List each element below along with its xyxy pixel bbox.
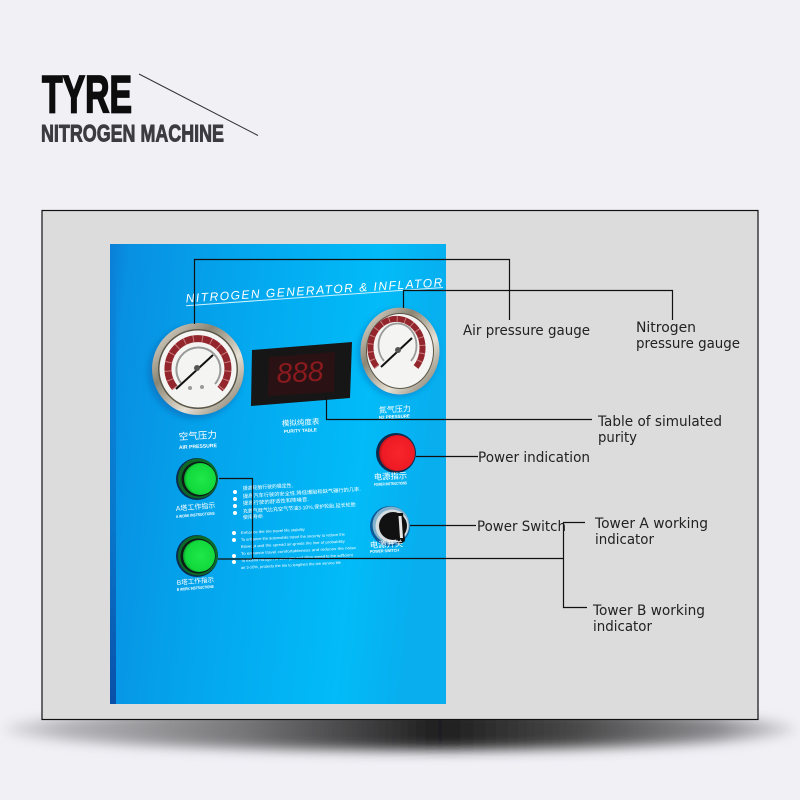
- power indicator light: [376, 433, 416, 473]
- label: Nitrogen pressure gauge: pressure gauge: [636, 336, 740, 352]
- air pressure label: 空气压力: [179, 429, 217, 443]
- tower A label: A WORK INSTRUCTIONS: [176, 511, 215, 519]
- instruction text: 使用寿命: [243, 513, 263, 521]
- subtitle: NITROGEN MACHINE: NITROGEN MACHINE: [41, 120, 224, 148]
- framed panel: [42, 210, 758, 720]
- instruction text: Enhance the tire travel life stability: [241, 528, 305, 535]
- tower A label: [175, 501, 216, 519]
- instruction text: [232, 482, 361, 570]
- instruction text: 提高轮胎行驶的稳定性,: [243, 482, 293, 492]
- air pressure label: AIR PRESSURE: [179, 443, 218, 451]
- power switch label: POWER SWITCH: [370, 547, 399, 554]
- label: Power Switch: Power Switch: [477, 519, 566, 535]
- tower B label: [176, 575, 215, 592]
- nitrogen pressure label: 氮气压力: [379, 403, 411, 415]
- label: Tower B working indicator: Tower B working: [592, 603, 705, 619]
- instruction text: To extend nitrogen to save gas and allow speed to the sufficient: [241, 553, 354, 563]
- instruction text: To enhance travel comfortableness and reduces the noise: [241, 546, 356, 556]
- label: Tower A working indicator: [594, 516, 708, 548]
- leader lines: [194, 260, 672, 608]
- purity table label: 模拟纯度表: [282, 416, 320, 428]
- instruction text: 提高汽车行驶的安全性,降低爆胎和缺气碾行的几率.: [243, 486, 361, 500]
- label: Nitrogen pressure gauge: [636, 320, 740, 352]
- air pressure gauge: [148, 323, 244, 419]
- tower B label: B塔工作指示: [176, 575, 215, 587]
- label: Nitrogen pressure gauge: Nitrogen: [636, 320, 696, 336]
- tower A label: A塔工作指示: [175, 501, 216, 513]
- floor shadow: [4, 708, 796, 750]
- panel heading: NITROGEN GENERATOR & INFLATOR: [185, 275, 443, 305]
- decorative title slash: [139, 74, 258, 136]
- machine front panel: [110, 244, 446, 704]
- tower B indicator light: [176, 535, 218, 577]
- instruction text: 提高行驶的舒适性和降噪音.: [243, 496, 309, 507]
- instruction text: air 3-10%, protects the tire to lengthen the tire service life: [241, 561, 341, 570]
- tower B label: B WORK INSTRUCTIONS: [177, 584, 214, 592]
- label: Tower B working indicator: indicator: [593, 619, 652, 635]
- nitrogen pressure gauge: [358, 308, 440, 397]
- purity table label: PURITY TABLE: [284, 427, 317, 434]
- label: Power indication: Power indication: [478, 450, 590, 466]
- label: Table of simulated purity: [597, 414, 722, 446]
- purity display: 888: [276, 356, 325, 389]
- label: Tower A working indicator: Tower A working: [594, 516, 708, 532]
- air pressure label: [179, 429, 218, 451]
- instruction text: 充氮气既气比充空气节油3-10%,保护轮胎,延长轮胎: [243, 501, 356, 515]
- instruction text: Blowout and the spread air-grinds the line of probability: [241, 540, 345, 549]
- label: Table of simulated purity: purity: [598, 430, 637, 446]
- title block: [41, 66, 224, 148]
- nitrogen pressure label: N2 PRESSURE: [379, 413, 410, 420]
- label: Table of simulated purity: Table of simulated: [597, 414, 722, 430]
- instruction text: To enhance the automobile travel the security to reduce the: [241, 533, 345, 542]
- nitrogen pressure label: [379, 403, 411, 420]
- tower A indicator light: [176, 458, 218, 500]
- label: Tower A working indicator: indicator: [595, 532, 654, 548]
- purity display: [251, 342, 352, 406]
- title: TYRE: TYRE: [42, 66, 132, 124]
- power indication label: POWER INSTRUCTIONS: [374, 480, 407, 487]
- purity table label: [282, 416, 320, 434]
- power switch label: 电源开关: [370, 538, 403, 550]
- label: Air pressure gauge: Air pressure gauge: [463, 323, 590, 339]
- power switch: [370, 506, 410, 546]
- label: Tower B working indicator: [592, 603, 705, 635]
- power indication label: 电源指示: [374, 470, 407, 482]
